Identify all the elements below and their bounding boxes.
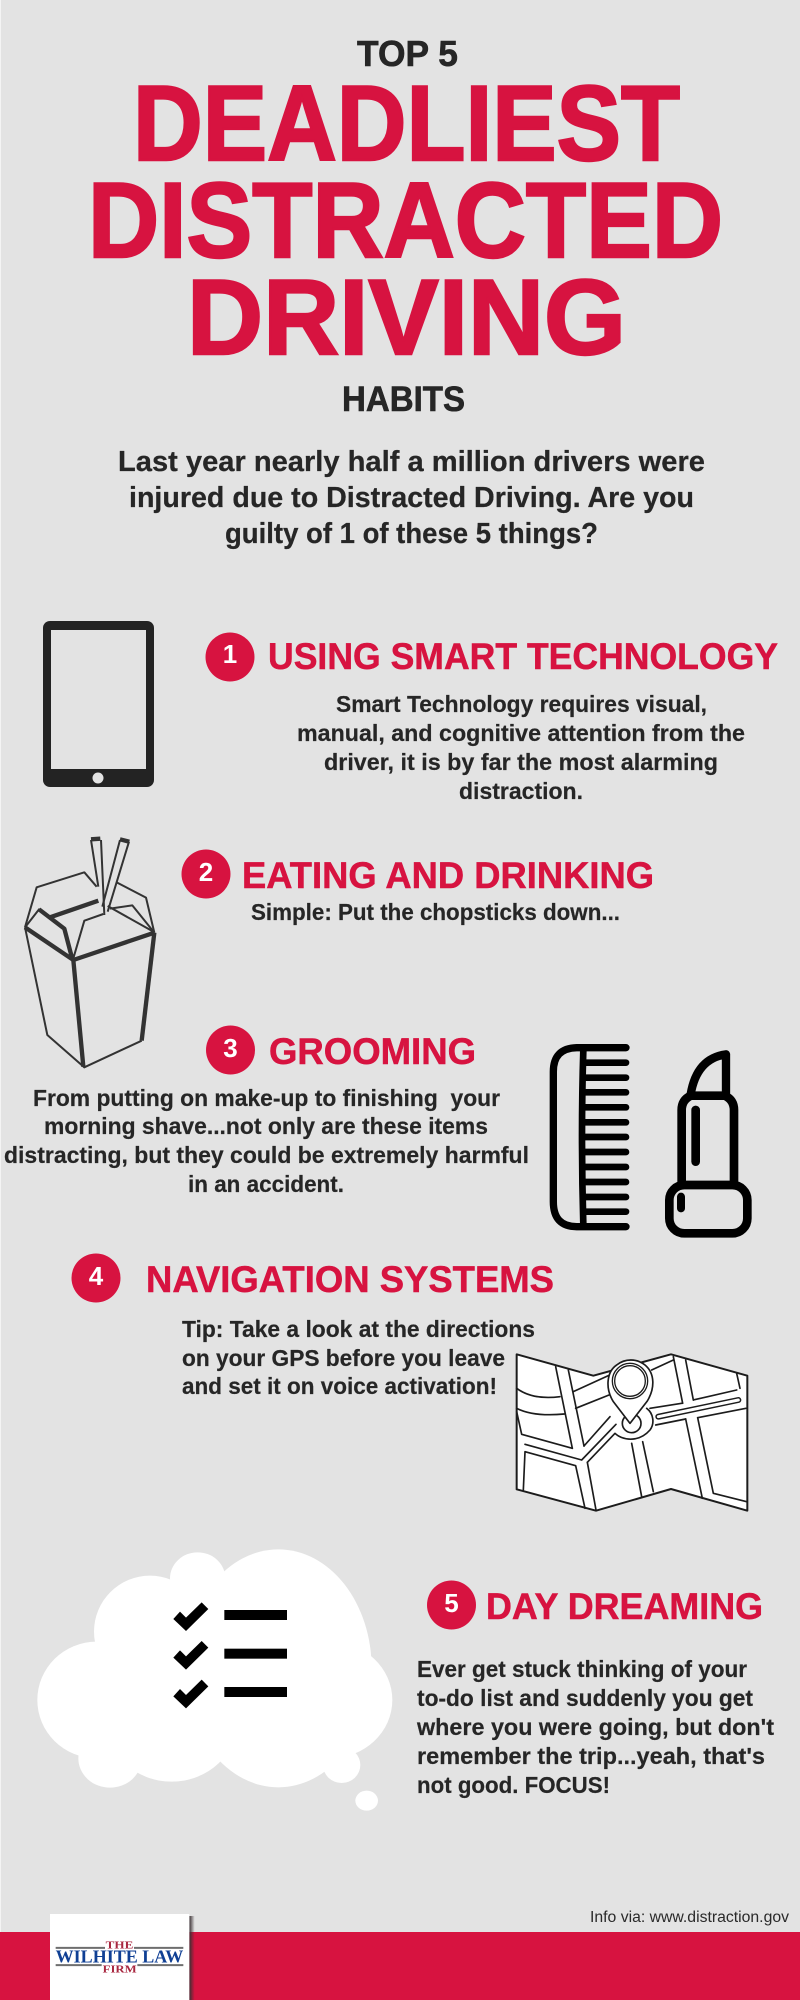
title block — [88, 33, 723, 419]
source credit: Info via: www.distraction.gov — [590, 1909, 789, 1926]
title: top 5: TOP 5 — [357, 33, 458, 74]
icon: lipstick — [669, 1054, 747, 1233]
icon: map with pin — [517, 1354, 747, 1511]
logo: the wilhite law firm: WILHITE LAW — [56, 1946, 184, 1966]
body text 4: Tip: Take a look at the directions — [182, 1316, 535, 1342]
number badge 1: 1 — [223, 639, 237, 669]
number badge 2: 2 — [199, 857, 213, 887]
icon: comb — [553, 1048, 626, 1227]
number badge 4 — [72, 1254, 120, 1302]
icon: thought cloud — [37, 1549, 392, 1811]
intro text: guilty of 1 of these 5 things? — [225, 518, 598, 550]
number badge 5: 5 — [444, 1588, 459, 1618]
number badge 5 — [427, 1580, 476, 1630]
title: driving: DRIVING — [187, 257, 626, 377]
body text 3: in an accident. — [188, 1171, 344, 1197]
icon: checklist — [173, 1602, 287, 1708]
icon: tablet — [43, 621, 154, 787]
body text 2: Simple: Put the chopsticks down... — [251, 899, 620, 925]
heading 5: DAY DREAMING — [486, 1586, 763, 1627]
body text 1 — [297, 691, 745, 804]
footer band — [0, 1932, 800, 2000]
heading 3: GROOMING — [269, 1031, 476, 1072]
body text 1: Smart Technology requires visual, — [336, 691, 707, 717]
logo: the wilhite law firm: FIRM — [103, 1963, 137, 1975]
panel: day dreaming — [37, 1549, 774, 1811]
logo: the wilhite law firm — [50, 1914, 195, 2000]
title: deadliest: DEADLIEST — [133, 63, 680, 183]
body text 3: distracting, but they could be extremely harmful — [4, 1142, 529, 1168]
title: habits: HABITS — [342, 380, 465, 419]
body text 4: and set it on voice activation! — [182, 1373, 497, 1399]
number badge 1 — [206, 632, 254, 682]
body text 1: distraction. — [459, 778, 583, 804]
body text 3: From putting on make-up to finishing your — [33, 1085, 500, 1111]
panel: grooming — [4, 1026, 747, 1233]
body text 5: to-do list and suddenly you get — [417, 1685, 753, 1711]
heading 4: NAVIGATION SYSTEMS — [146, 1259, 554, 1300]
body text 5: remember the trip...yeah, that's — [417, 1743, 765, 1769]
number badge 4: 4 — [89, 1261, 104, 1291]
body text 5 — [416, 1656, 774, 1798]
title: distracted: DISTRACTED — [88, 160, 723, 280]
icon: takeout box with chopsticks — [25, 839, 154, 1067]
body text 1: driver, it is by far the most alarming — [324, 749, 718, 775]
body text 4 — [182, 1316, 535, 1399]
number badge 3: 3 — [223, 1033, 238, 1063]
body text 1: manual, and cognitive attention from the — [297, 720, 745, 746]
heading 2: EATING AND DRINKING — [242, 855, 654, 896]
intro text — [118, 446, 705, 550]
body text 5: where you were going, but don't — [416, 1714, 774, 1740]
body text 5: Ever get stuck thinking of your — [417, 1656, 747, 1682]
logo: the wilhite law firm: THE — [106, 1939, 133, 1951]
panel: eating and drinking — [25, 839, 654, 1067]
intro text: Last year nearly half a million drivers were — [118, 446, 705, 478]
number badge 3 — [206, 1026, 255, 1074]
body text 3: morning shave...not only are these items — [44, 1113, 488, 1139]
panel: navigation systems — [72, 1254, 747, 1511]
body text 3 — [4, 1085, 529, 1197]
body text 4: on your GPS before you leave — [182, 1345, 505, 1371]
intro text: injured due to Distracted Driving. Are you — [129, 482, 694, 514]
body text 5: not good. FOCUS! — [417, 1772, 610, 1798]
heading 1: USING SMART TECHNOLOGY — [268, 636, 778, 677]
panel: using smart technology — [43, 621, 778, 804]
number badge 2 — [182, 850, 230, 898]
